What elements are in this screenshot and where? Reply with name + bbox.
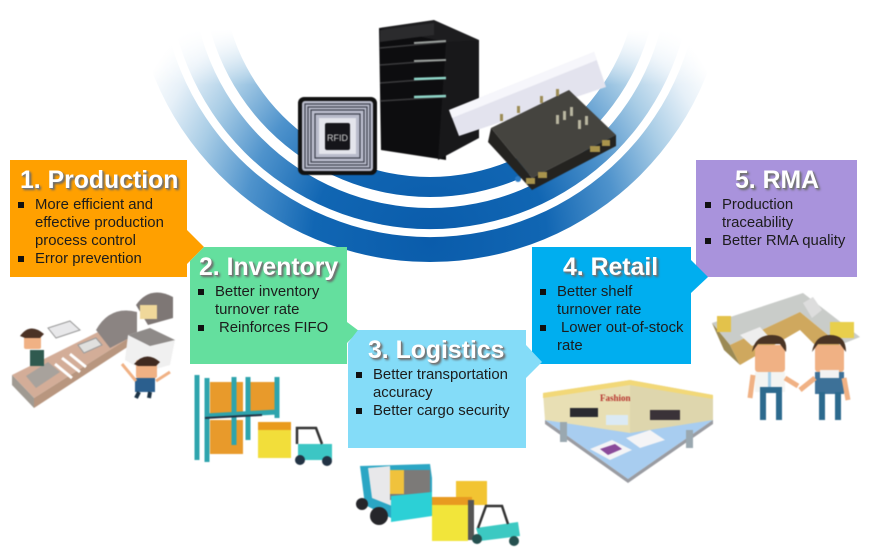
text: Logistics benefits: accuracy xyxy=(373,385,433,401)
text: Inventory benefits: Reinforces FIFO xyxy=(219,320,328,336)
text: RMA benefits: traceability xyxy=(722,215,793,231)
heading: 4. Retail: 4. Retail xyxy=(563,254,658,281)
text: Inventory benefits: turnover rate xyxy=(215,302,299,318)
text: Production benefits: process control xyxy=(35,233,136,249)
text: Retail benefits xyxy=(540,284,684,354)
heading: 3. Logistics: 3. Logistics xyxy=(368,337,504,364)
heading: 5. RMA: 5. RMA xyxy=(735,167,819,194)
text: RMA benefits: Better RMA quality xyxy=(722,233,845,249)
text: Retail benefits: rate xyxy=(557,338,583,354)
text: Production benefits: Error prevention xyxy=(35,251,142,267)
heading: 2. Inventory: 2. Inventory xyxy=(199,254,338,281)
text: Production benefits: More efficient and xyxy=(35,197,153,213)
text: Logistics benefits xyxy=(356,367,510,419)
text: Retail benefits: turnover rate xyxy=(557,302,641,318)
text: Inventory benefits: Better inventory xyxy=(215,284,319,300)
text: Production benefits xyxy=(18,197,164,267)
illustration: retail store: Fashion xyxy=(600,393,631,403)
heading: 1. Production: 1. Production xyxy=(20,167,178,194)
text: Logistics benefits: Better transportation xyxy=(373,367,508,383)
text: RMA benefits xyxy=(705,197,846,249)
text: Production benefits: effective production xyxy=(35,215,164,231)
text: Retail benefits: Lower out-of-stock xyxy=(561,320,683,336)
text: Inventory benefits xyxy=(198,284,328,336)
icon: RFID tag: RFID xyxy=(327,133,348,143)
text: RMA benefits: Production xyxy=(722,197,793,213)
text: Retail benefits: Better shelf xyxy=(557,284,632,300)
text: Logistics benefits: Better cargo security xyxy=(373,403,510,419)
